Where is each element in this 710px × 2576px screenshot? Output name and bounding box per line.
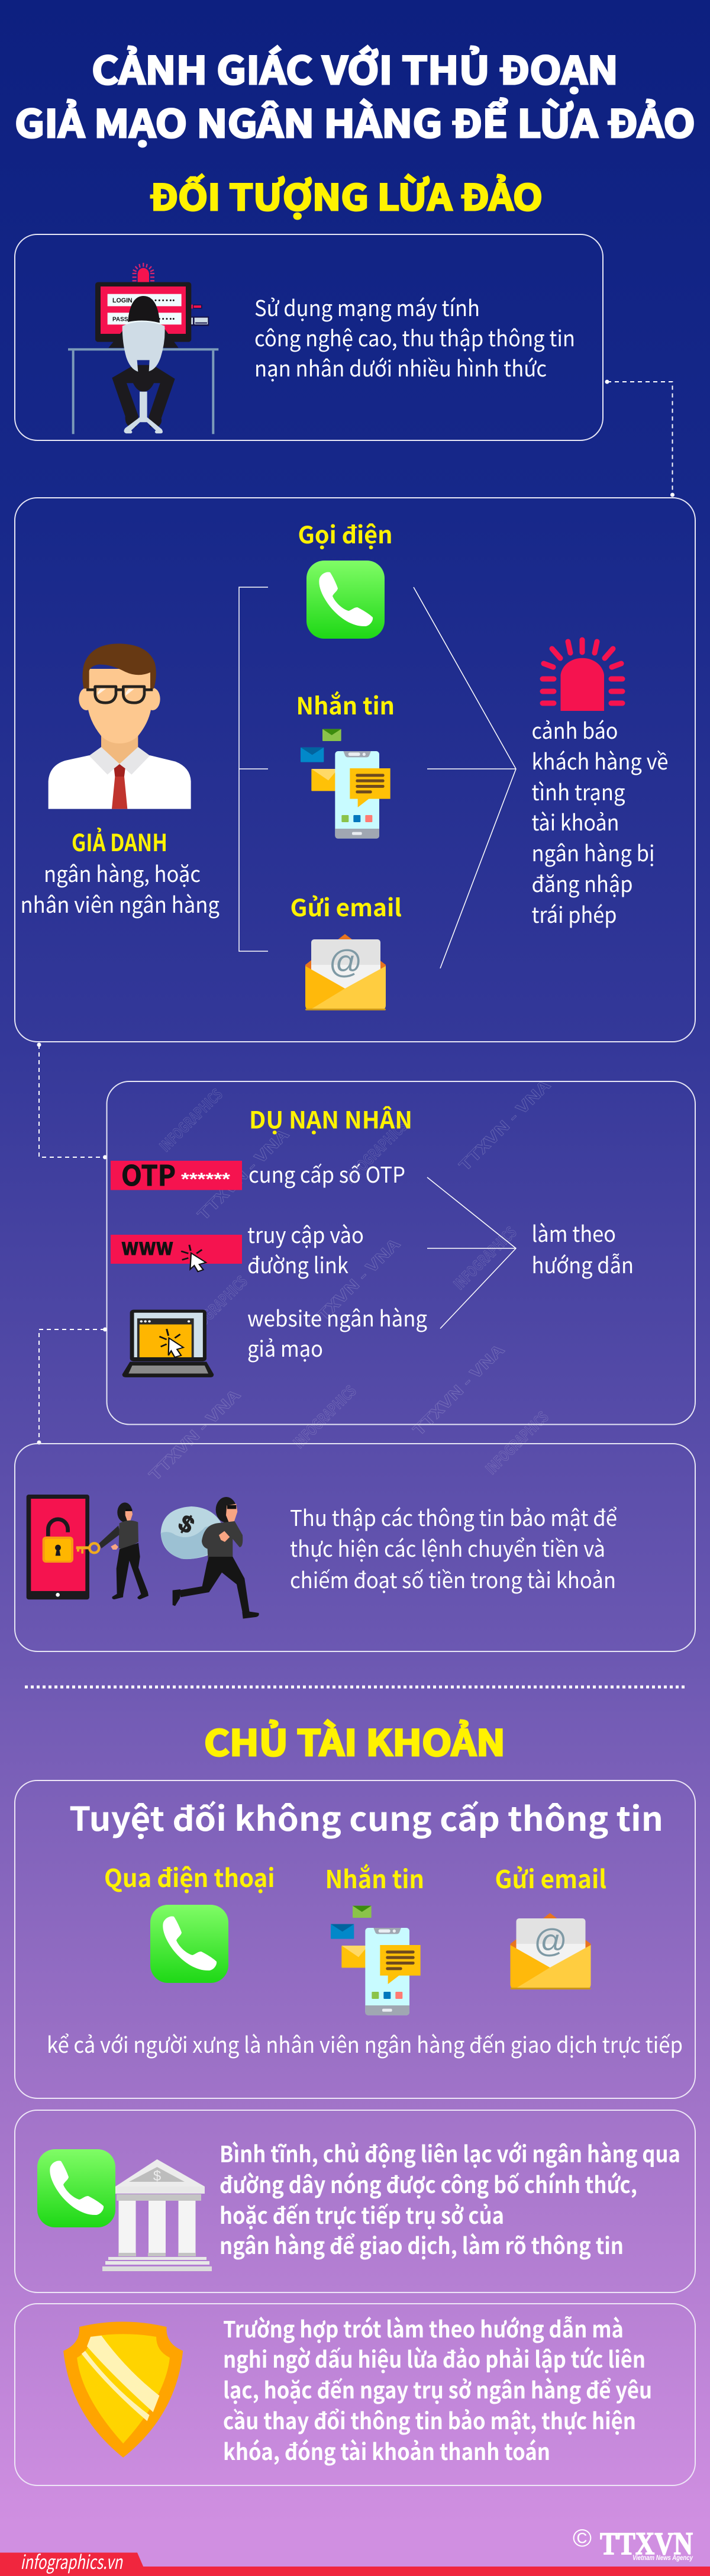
text block: cảnh báo <box>531 713 669 929</box>
text block: giả danh <box>20 824 220 919</box>
text block: trường hợp trót <box>223 2311 652 2466</box>
panel: tuyệt đối không cung cấp thông tin <box>15 1780 695 2098</box>
watermarks: INFOGRAPHICS <box>480 1406 553 1479</box>
text block: hacker description: Sử dụng mạng máy tính <box>254 291 480 323</box>
heading: đối tượng lừa đảo: ĐỐI TƯỢNG LỪA ĐẢO <box>150 169 543 221</box>
heading: tuyệt đối: Tuyệt đối không cung cấp thông tin <box>69 1793 663 1841</box>
panel: dụ nạn nhân <box>106 1081 695 1424</box>
icon: hacker at computer: PASS <box>112 316 128 323</box>
text: làm theo hướng dẫn <box>531 1216 634 1280</box>
channel: gọi điện <box>298 516 393 639</box>
icon: laptop with fake website <box>122 1310 214 1377</box>
text block: cảnh báo: tài khoản <box>531 805 619 837</box>
logo: ttxvn: Vietnam News Agency <box>632 2554 693 2562</box>
text block: bình tĩnh: đường dây nóng được công bố chính thức, <box>220 2167 637 2200</box>
panel: chiếm đoạt tiền <box>15 1444 695 1651</box>
watermarks: TTXVN - VNA <box>304 1233 405 1334</box>
text block: cảnh báo: trái phép <box>531 897 617 929</box>
text: truy cập vào đường link: truy cập vào <box>247 1218 364 1250</box>
channel: gửi email <box>495 1860 606 1989</box>
text block: trường hợp trót: nghi ngờ dấu hiệu lừa đảo phải lập tức liên <box>223 2342 646 2374</box>
title <box>15 41 695 149</box>
channel: gửi email: Gửi email <box>290 889 402 923</box>
text: kể cả: kể cả với người xưng là nhân viên ngân hàng đến giao dịch trực tiếp <box>47 2027 683 2059</box>
text block: cảnh báo: khách hàng về <box>531 744 669 776</box>
text: cung cấp số otp: cung cấp số OTP <box>248 1157 405 1189</box>
icon: www bar <box>111 1229 242 1271</box>
heading: chủ tài khoản: CHỦ TÀI KHOẢN <box>204 1715 505 1766</box>
text: website ngân hàng giả mạo: website ngân hàng <box>247 1301 427 1333</box>
text block: trường hợp trót: cầu thay đổi thông tin bảo mật, thực hiện <box>223 2403 636 2436</box>
icon: shield <box>63 2321 183 2458</box>
channel: qua điện thoại: Qua điện thoại <box>104 1859 275 1895</box>
channel: gọi điện: Gọi điện <box>298 516 393 550</box>
title: CẢNH GIÁC VỚI THỦ ĐOẠN <box>92 41 618 95</box>
text block: trường hợp trót: Trường hợp trót làm theo hướng dẫn mà <box>223 2311 624 2344</box>
converging lines <box>414 587 516 968</box>
logo: ttxvn: © <box>573 2524 592 2552</box>
text: làm theo hướng dẫn: làm theo <box>531 1216 616 1248</box>
arrow: connector panel 3 to panel 4 <box>37 1327 107 1444</box>
text block: bình tĩnh: ngân hàng để giao dịch, làm rõ thông tin <box>220 2228 624 2261</box>
text block: giả danh: ngân hàng, hoặc <box>44 856 201 888</box>
logo: ttxvn <box>573 2524 693 2562</box>
watermarks: INFOGRAPHICS <box>448 1222 521 1294</box>
channel: nhắn tin <box>325 1860 424 2015</box>
channel: gửi email <box>290 889 402 1010</box>
panel: hacker <box>15 234 603 440</box>
icon: thieves and unlocked phone <box>27 1495 259 1619</box>
text block: cảnh báo: tình trạng <box>531 775 625 807</box>
icon: bank employee <box>49 643 191 809</box>
watermarks: INFOGRAPHICS <box>179 1271 251 1343</box>
panel: trót làm theo <box>15 2304 695 2485</box>
watermarks: TTXVN - VNA <box>144 1384 245 1485</box>
icon: hacker at computer <box>68 263 218 434</box>
text block: cảnh báo: đăng nhập <box>531 867 633 899</box>
dotted divider <box>25 1686 685 1688</box>
icon: hacker at computer: LOGIN <box>112 297 133 304</box>
channel: gửi email: @ <box>329 943 362 980</box>
icon: otp bar: OTP <box>121 1153 176 1194</box>
heading: dụ nạn nhân: DỤ NẠN NHÂN <box>249 1101 412 1135</box>
footer bar <box>0 2548 710 2576</box>
text: infographics.vn: infographics.vn <box>20 2548 123 2575</box>
text: website ngân hàng giả mạo: giả mạo <box>247 1331 323 1363</box>
text block: giả danh: nhân viên ngân hàng <box>20 887 220 919</box>
channel: nhắn tin: Nhắn tin <box>296 687 395 722</box>
text: truy cập vào đường link: đường link <box>247 1248 349 1280</box>
watermarks: INFOGRAPHICS <box>339 1116 411 1188</box>
text block: hacker description: công nghệ cao, thu thập thông tin <box>254 321 575 353</box>
watermarks: TTXVN - VNA <box>408 1339 509 1440</box>
icon: phone <box>37 2149 115 2227</box>
text block: thu thập thông tin: Thu thập các thông tin bảo mật để <box>290 1500 617 1532</box>
channel: qua điện thoại <box>104 1859 275 1983</box>
text: làm theo hướng dẫn: hướng dẫn <box>531 1248 634 1280</box>
text block: trường hợp trót: lạc, hoặc đến ngay trụ sở ngân hàng để yêu <box>223 2372 652 2405</box>
channel: gửi email: @ <box>534 1922 567 1959</box>
icon: otp bar <box>111 1153 242 1194</box>
panel: giả danh <box>15 498 695 1042</box>
text block: bình tĩnh <box>220 2136 680 2261</box>
channel: nhắn tin <box>296 687 395 839</box>
bracket lines <box>239 587 268 951</box>
watermarks: TTXVN - VNA <box>192 1123 293 1225</box>
text block: giả danh: GIẢ DANH <box>72 824 167 858</box>
text block: thu thập thông tin: chiếm đoạt số tiền trong tài khoản <box>290 1563 616 1595</box>
arrow: connector panel 2 to panel 3 <box>37 1043 107 1159</box>
watermarks: INFOGRAPHICS <box>154 1084 227 1156</box>
text: website ngân hàng giả mạo <box>247 1301 427 1363</box>
text block: cảnh báo: cảnh báo <box>531 713 618 745</box>
icon: bank: $ <box>153 2168 161 2184</box>
icon: bank <box>102 2159 212 2271</box>
text block: trường hợp trót: khóa, đóng tài khoản thanh toán <box>223 2434 550 2466</box>
logo: ttxvn: TTXVN <box>600 2526 693 2561</box>
icon: alarm siren <box>543 640 622 711</box>
text block: hacker description <box>254 291 575 383</box>
text: truy cập vào đường link <box>247 1218 364 1280</box>
channel: nhắn tin: Nhắn tin <box>325 1860 424 1896</box>
text block: cảnh báo: ngân hàng bị <box>531 836 654 868</box>
text block: bình tĩnh: hoặc đến trực tiếp trụ sở của <box>220 2198 504 2230</box>
icon: thieves and unlocked phone: $ <box>174 1510 198 1539</box>
text block: thu thập thông tin <box>290 1500 617 1595</box>
icon: www bar: www <box>121 1229 173 1261</box>
text block: hacker description: nạn nhân dưới nhiều hình thức <box>254 351 547 383</box>
icon: otp bar: ****** <box>181 1170 230 1189</box>
text block: thu thập thông tin: thực hiện các lệnh chuyển tiền và <box>290 1531 605 1563</box>
arrow: connector panel 1 to panel 2 <box>605 380 674 497</box>
channel: gửi email: Gửi email <box>495 1860 606 1896</box>
converging lines <box>427 1177 516 1328</box>
watermarks <box>144 1074 555 1485</box>
watermarks: TTXVN - VNA <box>454 1074 555 1176</box>
title: GIẢ MẠO NGÂN HÀNG ĐỂ LỪA ĐẢO <box>15 94 695 149</box>
panel: liên lạc ngân hàng <box>15 2110 695 2292</box>
watermarks: INFOGRAPHICS <box>288 1380 360 1453</box>
